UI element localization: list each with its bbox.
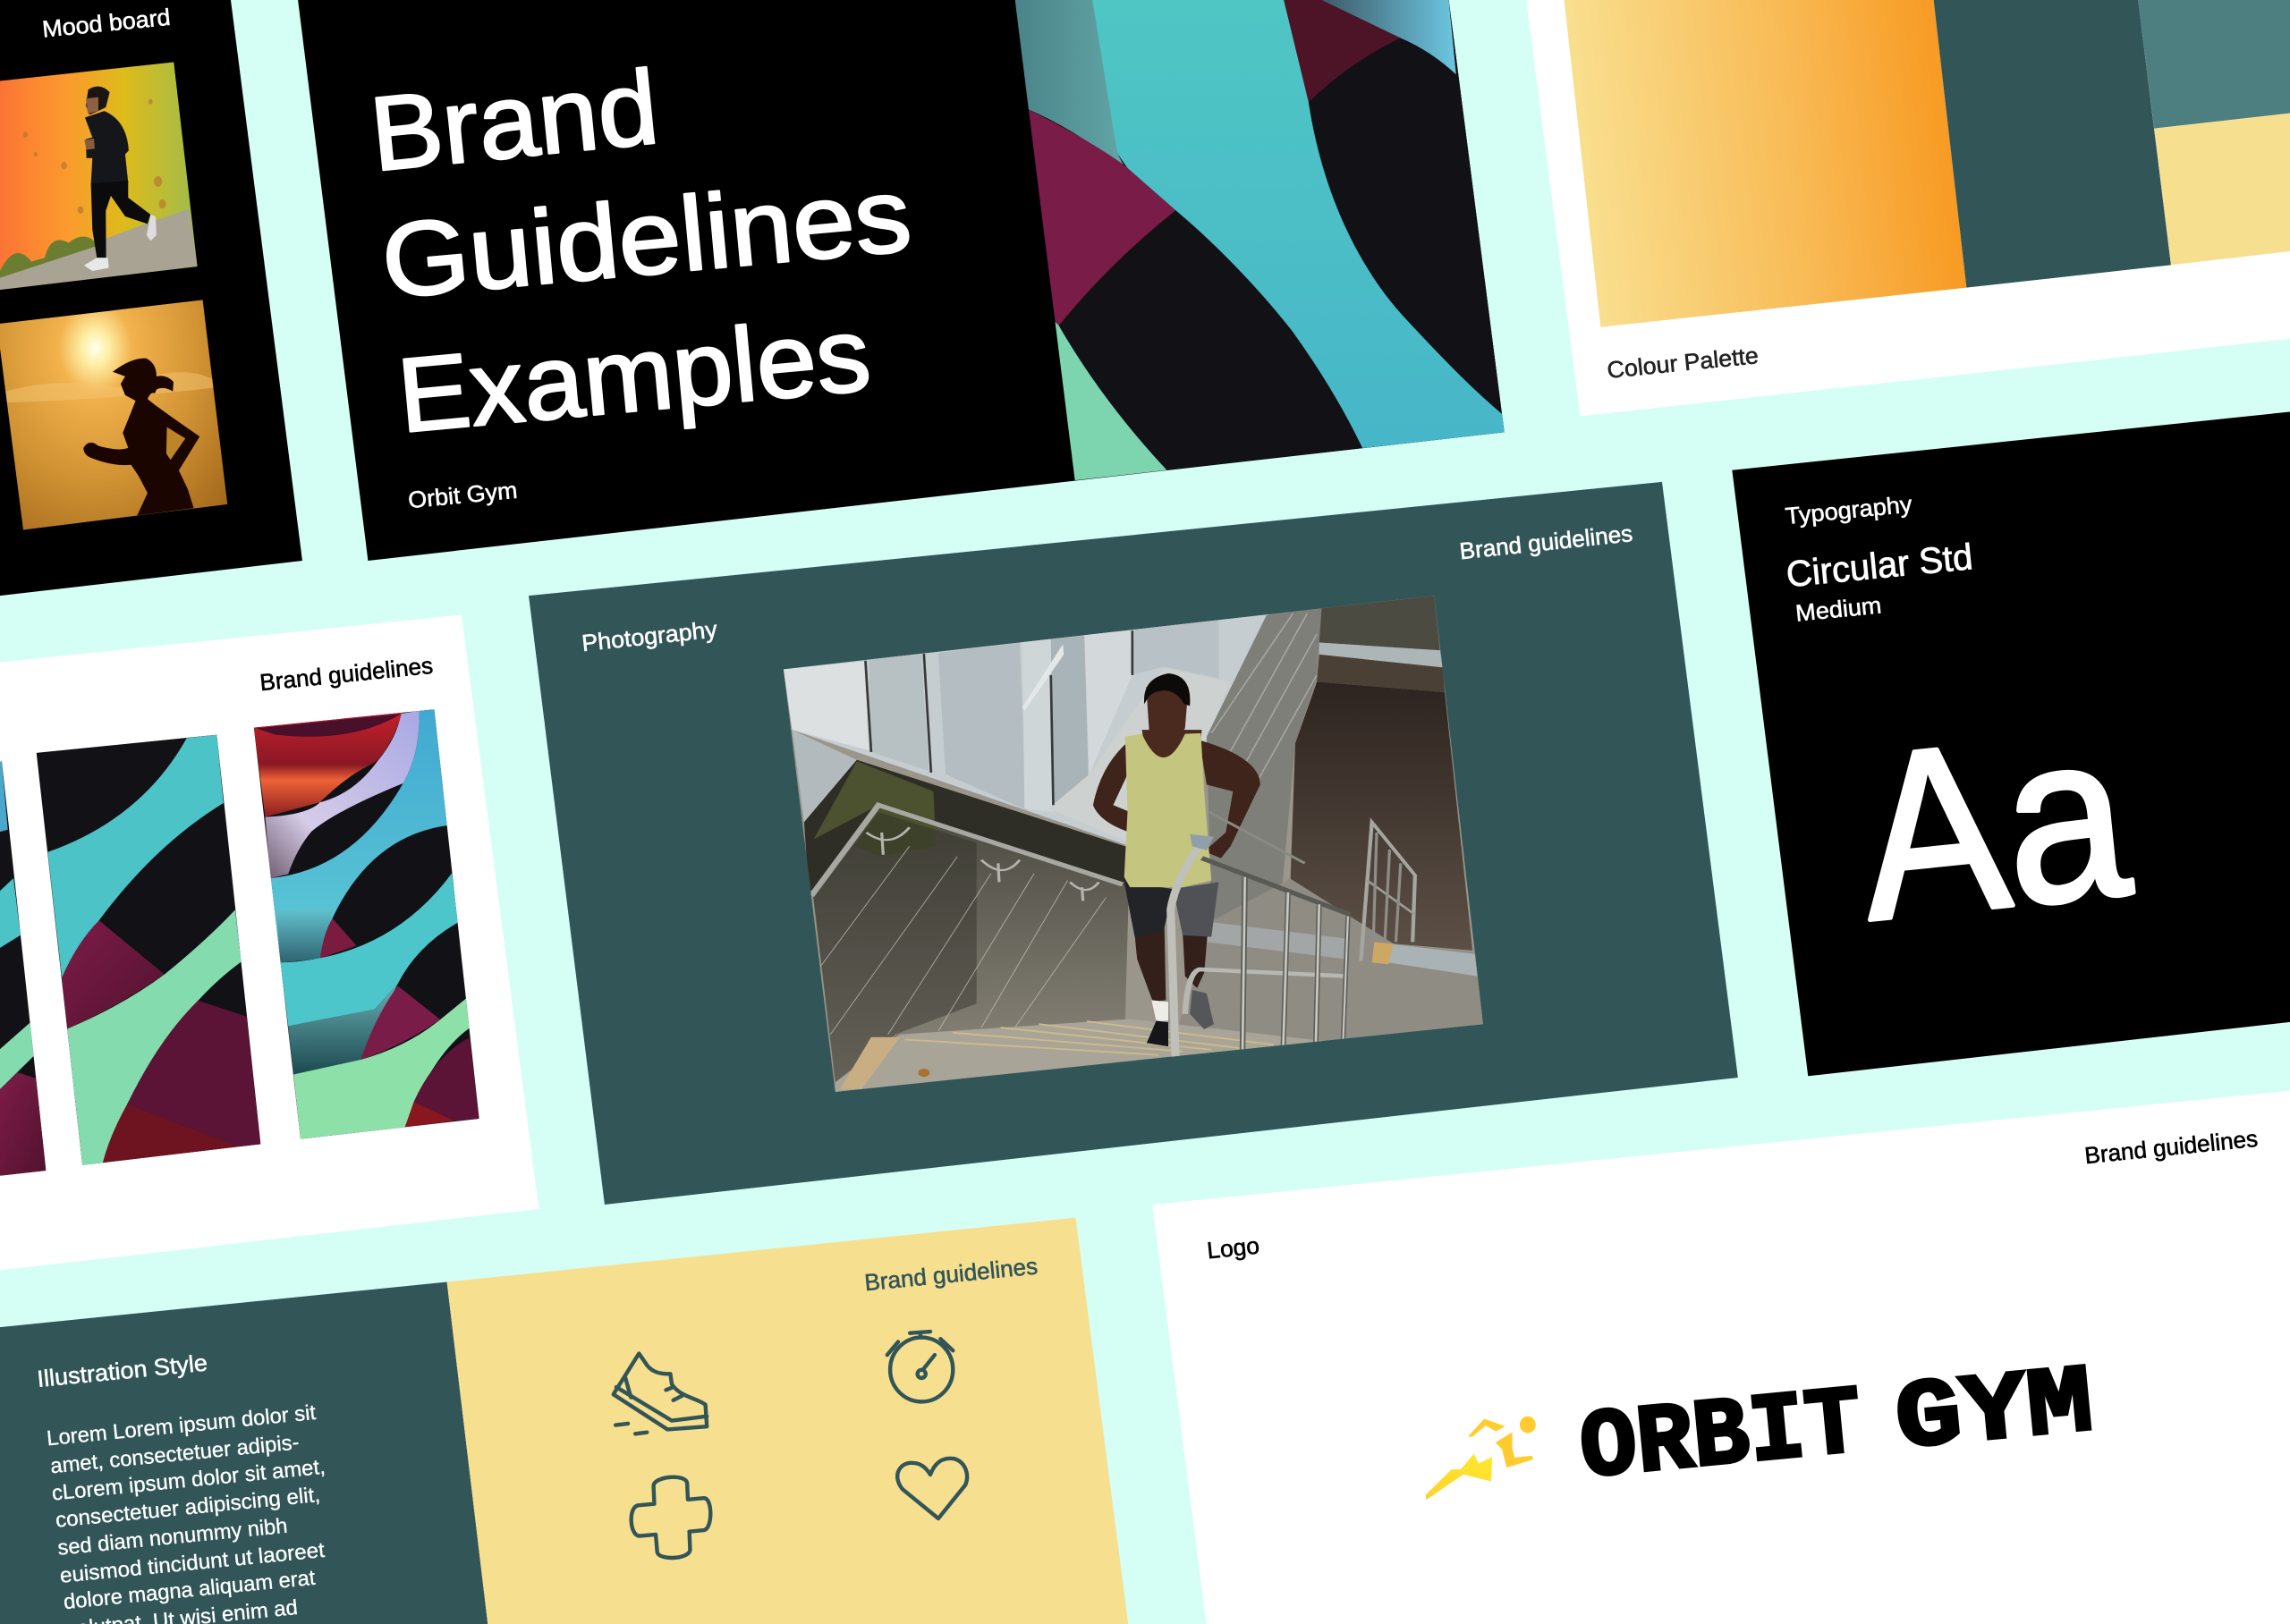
icon: running shoe (614, 1354, 707, 1434)
heading: photography: Photography (581, 615, 718, 656)
label: logo: Logo (1206, 1232, 1260, 1264)
image: abstract mural (1008, 0, 1512, 489)
icon: stopwatch (887, 1332, 953, 1401)
title (365, 48, 916, 454)
body text: amet, consectetuer adipis- (49, 1431, 301, 1478)
body text: dolore magna aliquam erat (63, 1567, 317, 1614)
swatch: gradient (1565, 0, 1966, 327)
stair balustrade glass (804, 760, 1130, 1082)
font name: Circular Std (1785, 536, 1974, 595)
body text (46, 1401, 327, 1624)
icon: running figure logo mark (1426, 1417, 1536, 1500)
label: brand guidelines: Brand guidelines (863, 1252, 1039, 1296)
panel: colour palette (1526, 0, 2290, 416)
panel: typography (1732, 411, 2290, 1076)
panel: title cover (298, 0, 1512, 561)
panel: logo (1152, 1091, 2290, 1624)
body text: consectetuer adipiscing elit, (55, 1484, 321, 1533)
strip: pattern right (251, 707, 485, 1142)
photo: man running up stairs (780, 593, 1489, 1096)
title: Brand (365, 48, 663, 193)
label: brand guidelines: Brand guidelines (2083, 1125, 2259, 1169)
logo wordmark (1575, 1349, 2098, 1506)
title: Examples (393, 295, 875, 454)
heading: mood board: Mood board (41, 4, 172, 43)
swatch: dark teal (1934, 0, 2171, 288)
body text: cLorem ipsum dolor sit amet, (51, 1456, 327, 1506)
photo: runner at brick wall (0, 56, 203, 297)
panel: illustration icons (447, 1218, 1128, 1624)
label: colour palette: Colour Palette (1606, 342, 1760, 384)
panel: illustration text (0, 1282, 488, 1624)
label: brand guidelines: Brand guidelines (1458, 520, 1634, 564)
panel: mood board (0, 0, 302, 596)
body text: euismod tincidunt ut laoreet (59, 1539, 326, 1588)
subtitle: Orbit Gym (407, 477, 519, 513)
label: brand guidelines: Brand guidelines (259, 652, 434, 696)
icon: heart (897, 1459, 967, 1518)
body text: sed diam nonummy nibh (56, 1515, 289, 1561)
swatch: mid teal (2138, 0, 2290, 129)
icon: medical cross (632, 1477, 710, 1558)
panel: photography (529, 482, 1738, 1205)
handrails (811, 805, 1415, 1057)
font weight: Medium (1794, 591, 1883, 627)
logo wordmark: ORBIT (1575, 1370, 1867, 1506)
label: typography: Typography (1784, 490, 1913, 529)
body text: Lorem Lorem ipsum dolor sit (46, 1401, 318, 1451)
swatch: pale yellow (2154, 114, 2290, 265)
title: Guidelines (377, 156, 916, 320)
runner figure (1093, 673, 1260, 1046)
logo wordmark: GYM (1891, 1349, 2098, 1476)
panel: brand pattern strips (0, 614, 539, 1270)
photo: runner silhouette at sunset (0, 293, 233, 535)
strip: cropped pattern left (0, 758, 49, 1180)
heading: illustration style: Illustration Style (36, 1349, 208, 1392)
strip: pattern centre (32, 731, 265, 1170)
specimen: Aa: Aa (1848, 681, 2141, 970)
